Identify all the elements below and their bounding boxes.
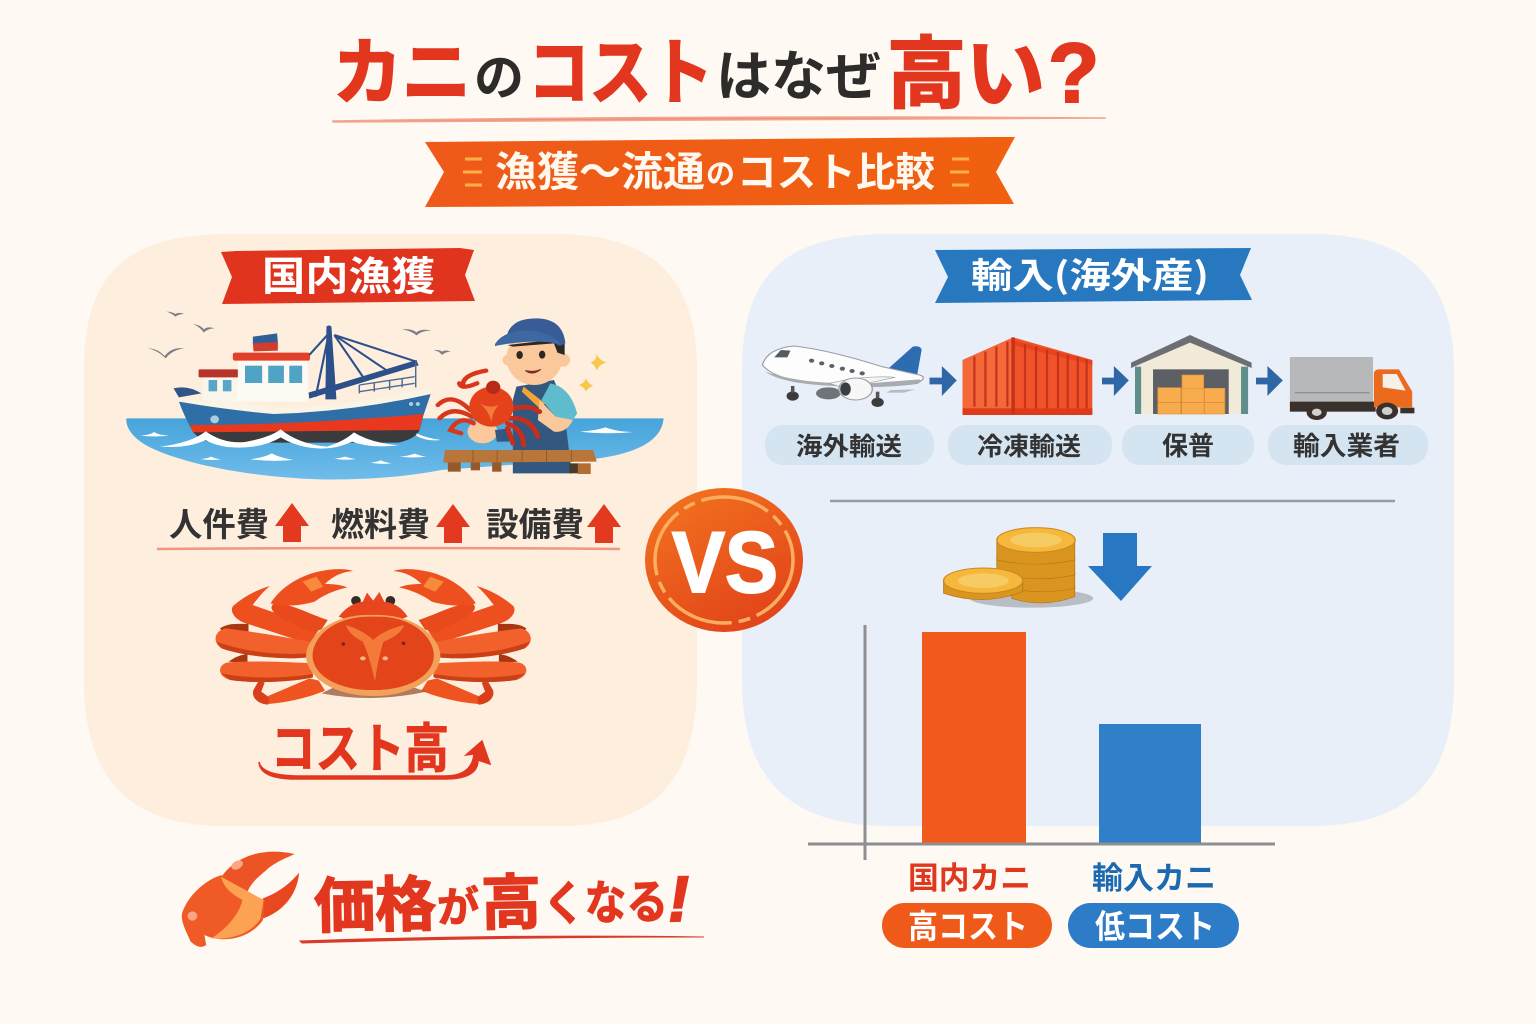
boat: [160, 325, 431, 449]
illustration: fishing boat and fisherman: [126, 312, 664, 479]
divider in import panel: [830, 500, 1395, 502]
heading: import: 輸入(海外産): [971, 248, 1209, 299]
step pills: 保普: [1162, 431, 1214, 461]
bar label: import: 輸入カニ: [1092, 861, 1216, 896]
title: コスト: [528, 34, 713, 114]
cost factors row: 燃料費: [331, 506, 430, 543]
arrow: cost down: [1088, 533, 1152, 601]
bar label: domestic: 国内カニ: [908, 861, 1031, 896]
panel: domestic catch: [84, 234, 697, 826]
panel: import: [742, 234, 1454, 826]
conclusion underline: [300, 936, 704, 943]
title underline: [333, 117, 1106, 122]
cost high label: コスト高: [271, 720, 449, 779]
subtitle ribbon: [425, 137, 1015, 207]
bar label: domestic: [882, 861, 1052, 948]
icon: truck: [1290, 357, 1414, 420]
small crab: [438, 371, 540, 445]
icon: crab claw: [182, 852, 299, 947]
bar label: import: 低コスト: [1095, 908, 1215, 945]
step pills: [765, 425, 1428, 465]
conclusion text: くなる: [543, 875, 669, 930]
title: の: [474, 50, 524, 106]
step pills: 輸入業者: [1293, 431, 1400, 461]
cost factors row: 設備費: [486, 506, 584, 543]
bar chart: [808, 625, 1275, 860]
arrow: [1256, 366, 1283, 396]
rising arrow: [259, 741, 490, 779]
step pills: 冷凍輸送: [977, 433, 1081, 461]
cost factors row: [169, 503, 621, 543]
heading: import: [935, 248, 1252, 303]
title: ?: [1048, 26, 1099, 120]
birds: [148, 312, 451, 358]
subtitle ribbon: 漁獲〜流通: [495, 138, 705, 198]
icon: container: [963, 337, 1092, 415]
conclusion text: 価格: [314, 871, 437, 940]
import logistics flow: [762, 335, 1414, 420]
bar label: import: [1068, 861, 1239, 948]
title: カニ: [333, 34, 471, 114]
title: はなぜ: [716, 47, 881, 107]
heading: domestic: 国内漁獲: [262, 255, 435, 299]
arrow: [930, 366, 957, 396]
arrow: [1102, 366, 1129, 396]
icon: coins: [944, 528, 1093, 608]
divider under cost factors: [157, 548, 620, 549]
icon: airplane: [762, 346, 923, 407]
subtitle ribbon: の: [706, 151, 735, 193]
step pills: 海外輸送: [796, 433, 902, 461]
fisherman: [467, 318, 606, 473]
small waves: [140, 427, 634, 464]
conclusion text: !: [667, 863, 690, 935]
subtitle ribbon: コスト比較: [737, 140, 935, 198]
sea: [126, 418, 664, 479]
title: [333, 26, 1099, 120]
cost factors row: 人件費: [169, 506, 269, 543]
conclusion text: [313, 863, 690, 941]
title: 高い: [887, 30, 1045, 118]
illustration: large crab: [216, 569, 531, 705]
conclusion text: が: [437, 883, 480, 931]
conclusion text: 高: [480, 869, 542, 937]
VS badge: [645, 488, 803, 632]
pier: [443, 450, 597, 474]
bar label: domestic: 高コスト: [908, 908, 1028, 945]
icon: warehouse: [1131, 335, 1252, 414]
heading: domestic: [221, 248, 475, 304]
VS badge: VS: [672, 515, 778, 611]
